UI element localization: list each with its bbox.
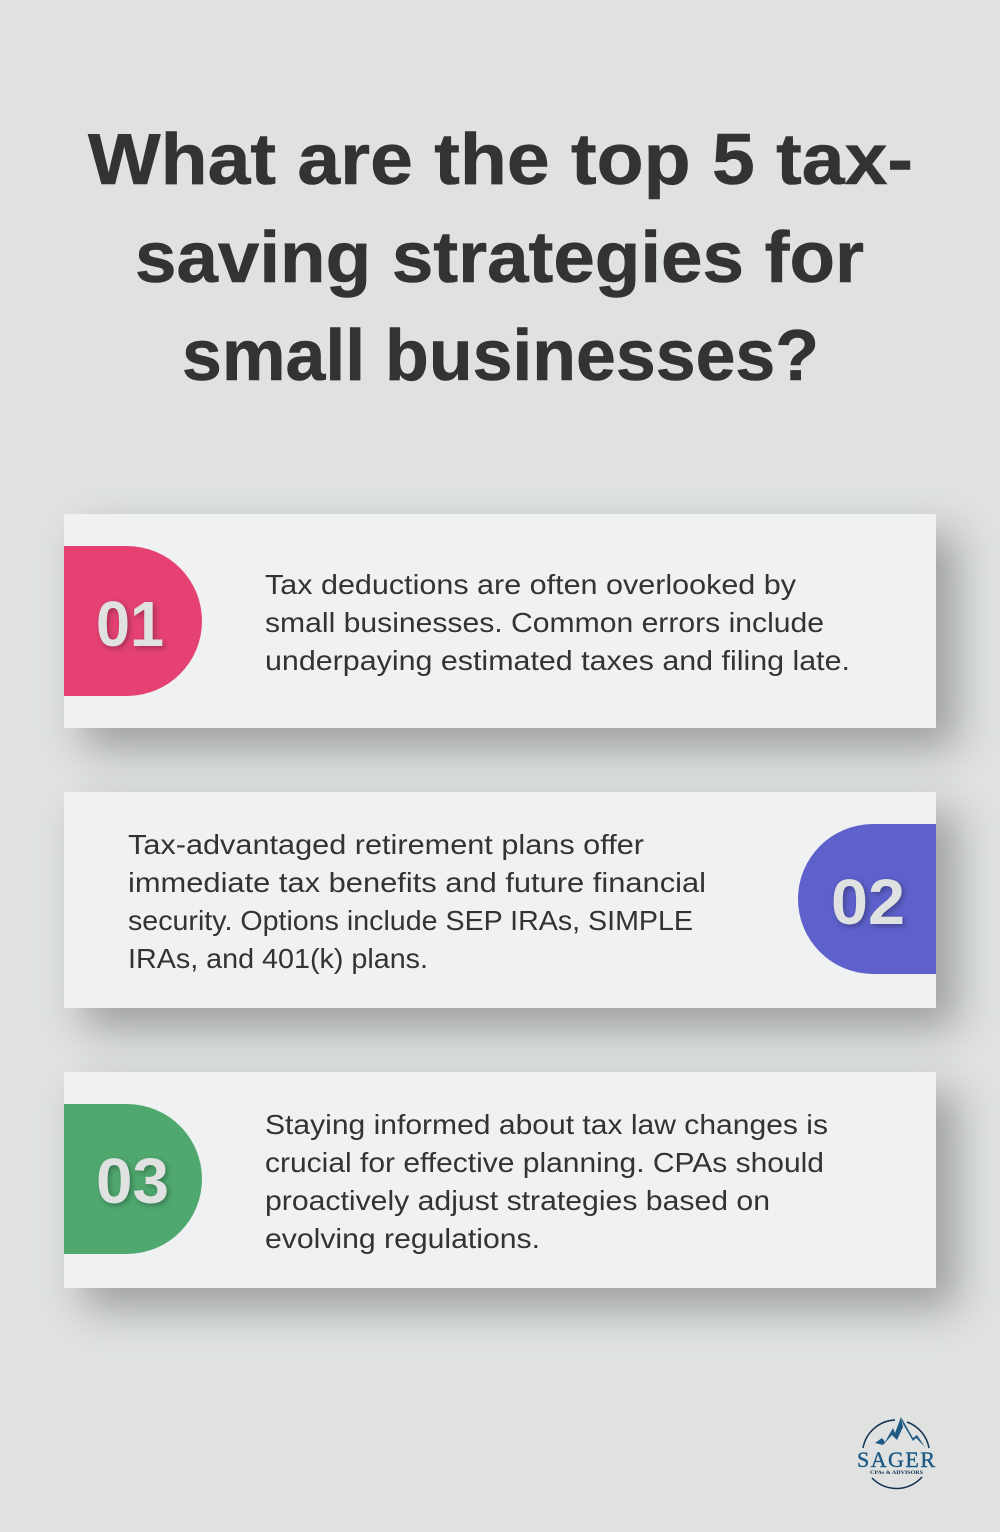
logo wordmark: SAGER xyxy=(857,1447,935,1472)
text: card 2: IRAs, and 401(k) plans. xyxy=(128,943,428,974)
number badge 03 xyxy=(64,1104,202,1254)
panel: card 3 xyxy=(64,1072,936,1288)
text: card 1: small businesses. Common errors include xyxy=(265,607,824,638)
number badge 01: 01 xyxy=(96,588,164,660)
text: card 1: underpaying estimated taxes and filing late. xyxy=(265,645,850,676)
text: card 1: Tax deductions are often overlooked by xyxy=(265,569,796,600)
text: card 1 xyxy=(265,569,850,676)
text: card 2 xyxy=(128,829,706,974)
panel: card 1 xyxy=(64,514,936,728)
text: card 3: crucial for effective planning. CPAs should xyxy=(265,1147,824,1178)
text: card 2: immediate tax benefits and future financial xyxy=(128,867,706,898)
text: card 3: proactively adjust strategies based on xyxy=(265,1185,770,1216)
number badge 02 xyxy=(798,824,936,974)
text: card 3: Staying informed about tax law changes is xyxy=(265,1109,828,1140)
title: What are the top 5 tax- xyxy=(88,120,913,200)
text: card 3: evolving regulations. xyxy=(265,1223,540,1254)
logo ring xyxy=(863,1420,929,1488)
number badge 03: 03 xyxy=(96,1145,169,1217)
logo: Sager CPAs & Advisors xyxy=(857,1417,936,1490)
number badge 01 xyxy=(64,546,202,696)
title: saving strategies for xyxy=(135,218,864,298)
number badge 02: 02 xyxy=(831,866,905,938)
title xyxy=(88,120,913,396)
title: small businesses? xyxy=(182,316,819,396)
text: card 2: Tax-advantaged retirement plans offer xyxy=(128,829,644,860)
text: card 2: security. Options include SEP IRAs, SIMPLE xyxy=(128,905,693,936)
logo mountain xyxy=(875,1417,925,1447)
logo tagline: CPAs & ADVISORS xyxy=(870,1471,923,1476)
panel: card 2 xyxy=(64,792,936,1008)
